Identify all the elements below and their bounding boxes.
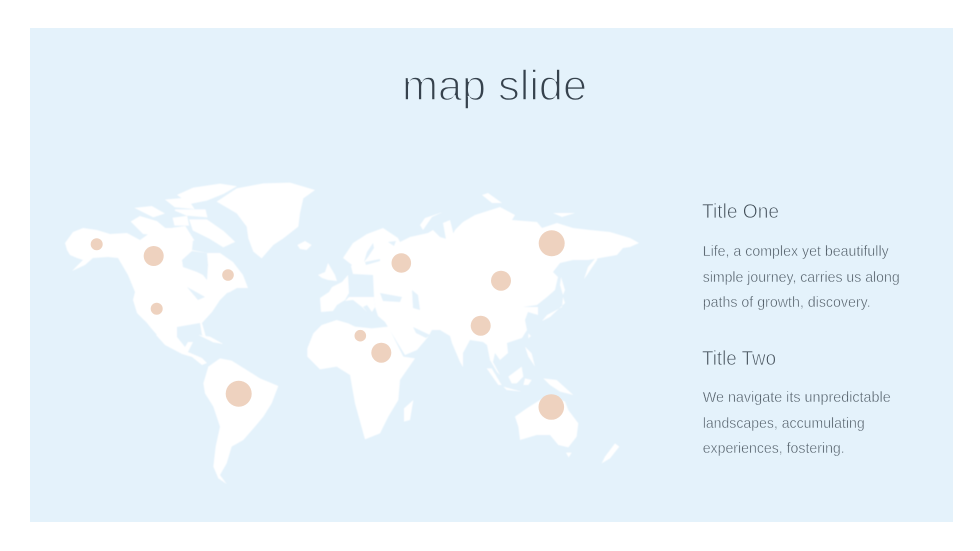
land: British Isles (318, 263, 337, 281)
land: Tasmania (566, 453, 572, 457)
circle: North Africa (354, 330, 366, 342)
data circles (91, 230, 565, 420)
body: Title Two line 3: experiences, fostering. (703, 441, 845, 457)
land: Kara islands (443, 220, 455, 245)
circle: Siberia (539, 230, 565, 256)
land: Iberia and France (320, 275, 349, 312)
land: Cuba and Hispaniola (198, 335, 223, 344)
sea: Great Lakes (187, 287, 205, 300)
sea: Gulf of Bothnia (364, 243, 374, 262)
body: Title One line 2: simple journey, carries us along (703, 270, 900, 286)
heading: Title One: Title One (702, 201, 779, 223)
body: Title One line 3: paths of growth, discovery. (703, 295, 871, 311)
circle: Sudan (371, 343, 391, 363)
body: Title One line 1: Life, a complex yet beautifully (703, 244, 889, 260)
circle: USA (151, 303, 163, 315)
land: Sakhalin (560, 277, 565, 295)
land: Novaya Zemlya (420, 212, 443, 230)
land: Australia (515, 395, 578, 447)
text block: Title Two (702, 348, 891, 457)
land: Arctic islands (132, 184, 235, 247)
sea: Gulf of Finland (365, 259, 380, 265)
circle: Russia (392, 253, 411, 273)
land: Iceland (297, 241, 312, 250)
circle: Australia (538, 394, 564, 420)
land: Oceania (487, 333, 619, 463)
land: Arctic island (553, 213, 575, 217)
land: Africa (307, 320, 415, 439)
title: map slide (402, 62, 587, 110)
heading: Title Two: Title Two (702, 348, 776, 370)
body: Title Two line 1: We navigate its unpredictable (703, 390, 891, 406)
sea: Gulf of California (143, 321, 157, 335)
sea: Hudson Bay (182, 251, 208, 280)
circle: Alaska (91, 238, 103, 250)
sea: Persian Gulf (413, 327, 430, 338)
land: Japan (542, 297, 565, 321)
circle: Quebec (222, 269, 234, 281)
sea: Caspian (412, 290, 420, 310)
land: Madagascar (404, 400, 413, 422)
land: North America (65, 228, 248, 365)
world map (65, 183, 639, 484)
sea: White Sea (388, 241, 396, 246)
circle: South Asia (471, 316, 491, 336)
land: Eurasia (343, 207, 639, 375)
circle: Mongolia (491, 271, 511, 291)
land: Svalbard (482, 193, 502, 203)
land: Kamchatka (584, 255, 598, 279)
body: Title Two line 2: landscapes, accumulating (703, 416, 865, 432)
circle: Brazil (226, 381, 252, 407)
circle: Canada (144, 246, 164, 266)
sea: Black Sea (380, 293, 402, 302)
land: southern Europe (345, 297, 375, 312)
land: Indonesia (487, 333, 573, 395)
text block: Title One (702, 201, 900, 311)
land: Greenland (198, 183, 315, 484)
land: South America (203, 358, 278, 484)
land: New Zealand (602, 443, 619, 463)
